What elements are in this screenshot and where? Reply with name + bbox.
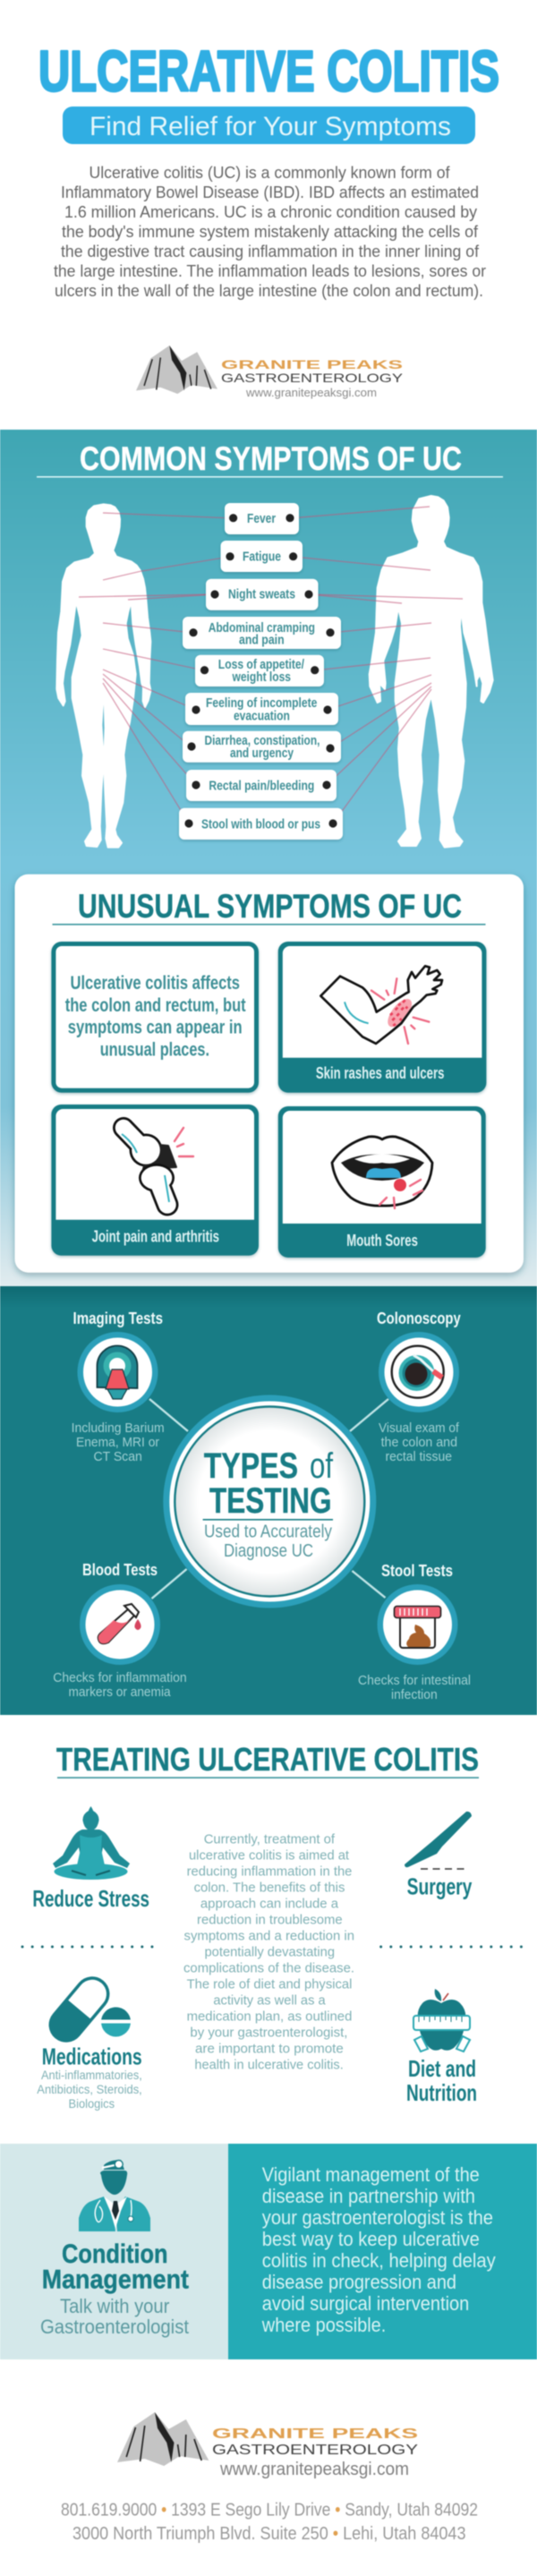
subtitle pill: Find Relief for Your Symptoms bbox=[90, 112, 451, 141]
heading: common symptoms: COMMON SYMPTOMS OF UC bbox=[80, 439, 462, 477]
symptom: abdominal cramping bbox=[183, 617, 341, 649]
treatment paragraph: reduction in troublesome bbox=[197, 1912, 343, 1928]
intro paragraph: ulcers in the wall of the large intestine (the colon and rectum). bbox=[55, 282, 483, 300]
panel: condition management: Gastroenterologist bbox=[40, 2316, 189, 2338]
intro paragraph: the digestive tract causing inflammation in the inner lining of bbox=[61, 243, 480, 260]
treatment paragraph bbox=[183, 1831, 354, 2073]
treatment paragraph: ulcerative colitis is aimed at bbox=[189, 1847, 350, 1864]
treatment paragraph: health in ulcerative colitis. bbox=[194, 2057, 344, 2073]
test: stool: infection bbox=[391, 1688, 438, 1702]
body silhouette: woman bbox=[56, 504, 150, 848]
symptom: diarrhea: and urgency bbox=[230, 746, 294, 761]
panel: vigilant management bbox=[228, 2144, 537, 2359]
treatment: diet and nutrition: Diet and bbox=[408, 2055, 476, 2082]
section background: intro bbox=[0, 0, 537, 430]
test: colonoscopy: the colon and bbox=[381, 1436, 457, 1450]
symptom: fever: Fever bbox=[247, 511, 276, 526]
panel: vigilant management: disease progression and bbox=[262, 2271, 456, 2293]
treatment paragraph: colon. The benefits of this bbox=[194, 1880, 345, 1896]
treatment paragraph: activity as well as a bbox=[213, 1992, 326, 2009]
treatment: medications: Biologics bbox=[68, 2096, 115, 2111]
symptom: incomplete evacuation: evacuation bbox=[234, 709, 290, 723]
test: colonoscopy: Visual exam of bbox=[379, 1421, 460, 1436]
center circle: types of testing: of bbox=[310, 1446, 334, 1486]
icon: scalpel bbox=[405, 1812, 472, 1869]
panel: condition management: Condition bbox=[62, 2239, 168, 2269]
icon: mouth bbox=[332, 1137, 432, 1208]
icon: meditation bbox=[53, 1806, 130, 1880]
treatment: medications bbox=[37, 1969, 142, 2111]
dotted divider left bbox=[22, 1946, 152, 1948]
intro paragraph bbox=[54, 164, 486, 300]
symptom: night sweats bbox=[206, 579, 319, 610]
panel: vigilant management: avoid surgical intervention bbox=[262, 2292, 469, 2315]
icon: arm with rash bbox=[320, 966, 442, 1044]
treatment paragraph: by your gastroenterologist, bbox=[190, 2025, 347, 2041]
icon: joint bbox=[122, 1128, 193, 1205]
logo: Granite Peaks bottom: www.granitepeaksgi.com bbox=[219, 2460, 409, 2479]
contact details: 3000 North Triumph Blvd. Suite 250 • Lehi, Utah 84043 bbox=[72, 2524, 465, 2544]
section background: testing bbox=[0, 1286, 537, 1715]
logo: Granite Peaks top: GRANITE PEAKS bbox=[221, 357, 403, 371]
treatment paragraph: symptoms and a reduction in bbox=[184, 1928, 354, 1944]
intro paragraph: Ulcerative colitis (UC) is a commonly known form of bbox=[90, 164, 450, 182]
symptom: stool with blood: Stool with blood or pus bbox=[201, 816, 320, 832]
contact details bbox=[61, 2501, 478, 2544]
symptom: rectal pain: Rectal pain/bleeding bbox=[209, 779, 314, 793]
card: joint pain: Joint pain and arthritis bbox=[92, 1228, 219, 1246]
panel: unusual symptoms bbox=[14, 874, 524, 1273]
symptom: fatigue: Fatigue bbox=[243, 550, 281, 565]
symptom: abdominal cramping: and pain bbox=[239, 632, 285, 648]
treatment paragraph: The role of diet and physical bbox=[187, 1976, 352, 1992]
symptom: diarrhea: Diarrhea, constipation, bbox=[204, 733, 320, 748]
symptom: night sweats: Night sweats bbox=[228, 587, 295, 602]
treatment paragraph: medication plan, as outlined bbox=[187, 2009, 352, 2025]
treatment: medications: Anti-inflammatories, bbox=[41, 2068, 142, 2082]
card: mouth sores bbox=[278, 1106, 486, 1258]
card: mouth sores: Mouth Sores bbox=[346, 1232, 418, 1250]
icon: test tube bbox=[98, 1604, 141, 1643]
panel: vigilant management: colitis in check, helping delay bbox=[262, 2249, 496, 2272]
treatment: diet and nutrition bbox=[406, 1989, 477, 2106]
treatment: reduce stress: Reduce Stress bbox=[32, 1885, 149, 1912]
treatment paragraph: potentially devastating bbox=[204, 1944, 335, 1960]
test: blood: Checks for inflammation bbox=[53, 1671, 187, 1685]
test: blood: markers or anemia bbox=[68, 1685, 171, 1700]
icon: doctor bbox=[79, 2160, 150, 2231]
icon: apple with tape bbox=[413, 1989, 470, 2051]
subtitle pill bbox=[63, 107, 475, 144]
icon: pills bbox=[42, 1969, 132, 2050]
symptom: loss of appetite: weight loss bbox=[232, 670, 291, 685]
symptom: fever bbox=[225, 503, 299, 534]
panel: vigilant management: disease in partnership with bbox=[262, 2185, 475, 2207]
test: blood: Blood Tests bbox=[82, 1561, 158, 1579]
icon: MRI scanner bbox=[97, 1346, 138, 1399]
symptom: abdominal cramping: Abdominal cramping bbox=[209, 620, 315, 635]
icon: mountain bbox=[117, 2412, 209, 2466]
test: colonoscopy bbox=[377, 1309, 461, 1464]
card: skin rashes bbox=[278, 942, 486, 1093]
icon: colonoscopy view bbox=[392, 1346, 444, 1398]
treatment: medications: Antibiotics, Steroids, bbox=[37, 2082, 142, 2096]
symptom: rectal pain bbox=[186, 770, 337, 801]
test: colonoscopy: rectal tissue bbox=[385, 1450, 452, 1464]
panel: vigilant management: your gastroenterologist is the bbox=[262, 2206, 493, 2229]
dotted divider right bbox=[381, 1946, 521, 1948]
panel: condition management: Talk with your bbox=[60, 2295, 169, 2317]
card: intro text: Ulcerative colitis affects bbox=[70, 973, 240, 994]
section background: treatment bbox=[0, 1715, 537, 2144]
card: intro text: the colon and rectum, but bbox=[65, 995, 246, 1016]
card: intro text: unusual places. bbox=[100, 1040, 209, 1060]
logo: Granite Peaks top bbox=[136, 345, 404, 399]
contact details: 801.619.9000 • 1393 E Sego Lily Drive • Sandy, Utah 84092 bbox=[61, 2501, 478, 2521]
symptom: incomplete evacuation: Feeling of incomplete bbox=[206, 695, 317, 711]
logo: Granite Peaks bottom: GRANITE PEAKS bbox=[212, 2427, 419, 2442]
test: blood bbox=[53, 1561, 187, 1700]
intro paragraph: the body's immune system mistakenly attacking the cells of bbox=[62, 223, 479, 241]
center circle: types of testing: TESTING bbox=[209, 1481, 331, 1521]
test: stool: Checks for intestinal bbox=[358, 1674, 471, 1688]
treatment: surgery: Surgery bbox=[407, 1873, 473, 1900]
icon: stool sample jar bbox=[394, 1606, 440, 1648]
symptom: fatigue bbox=[220, 541, 303, 572]
test: imaging: Enema, MRI or bbox=[76, 1436, 159, 1450]
logo: Granite Peaks top: www.granitepeaksgi.com bbox=[245, 386, 377, 399]
test: imaging: Including Barium bbox=[72, 1421, 165, 1436]
symptom: diarrhea bbox=[183, 731, 341, 763]
symptom: incomplete evacuation bbox=[185, 693, 338, 725]
treatment: surgery bbox=[405, 1812, 473, 1900]
center circle: types of testing: Used to Accurately bbox=[204, 1522, 332, 1541]
center circle: types of testing: Diagnose UC bbox=[224, 1541, 313, 1561]
leader lines: symptoms to bodies bbox=[79, 507, 463, 823]
center circle: types of testing bbox=[163, 1395, 376, 1608]
symptom: loss of appetite: Loss of appetite/ bbox=[218, 657, 305, 672]
icon: mountain bbox=[136, 345, 217, 394]
treatment: diet and nutrition: Nutrition bbox=[406, 2079, 477, 2106]
test: stool: Stool Tests bbox=[381, 1562, 453, 1580]
panel: condition management: Management bbox=[42, 2265, 189, 2295]
card: intro text bbox=[54, 943, 257, 1090]
logo: Granite Peaks bottom: GASTROENTEROLOGY bbox=[212, 2443, 418, 2458]
intro paragraph: Inflammatory Bowel Disease (IBD). IBD affects an estimated bbox=[61, 183, 479, 201]
treatment paragraph: Currently, treatment of bbox=[204, 1831, 336, 1847]
panel: condition management bbox=[0, 2144, 229, 2359]
intro paragraph: 1.6 million Americans. UC is a chronic condition caused by bbox=[64, 203, 477, 221]
card: skin rashes: Skin rashes and ulcers bbox=[316, 1064, 444, 1082]
panel: vigilant management: where possible. bbox=[261, 2314, 386, 2336]
treatment: medications: Medications bbox=[42, 2043, 142, 2070]
symptom: stool with blood bbox=[179, 808, 343, 840]
test: imaging: Imaging Tests bbox=[73, 1309, 163, 1327]
treatment paragraph: approach can include a bbox=[200, 1896, 339, 1912]
symptom: loss of appetite bbox=[195, 655, 324, 687]
body silhouette: man bbox=[370, 496, 493, 848]
treatment paragraph: complications of the disease. bbox=[183, 1960, 354, 1976]
center circle: types of testing: TYPES bbox=[204, 1446, 298, 1486]
connector lines bbox=[149, 1399, 388, 1599]
test: colonoscopy: Colonoscopy bbox=[377, 1309, 461, 1327]
treatment: reduce stress bbox=[32, 1806, 149, 1912]
treatment paragraph: are important to promote bbox=[195, 2041, 344, 2057]
test: imaging bbox=[72, 1309, 165, 1464]
treatment paragraph: reducing inflammation in the bbox=[187, 1864, 352, 1880]
logo: Granite Peaks bottom bbox=[117, 2412, 419, 2479]
test: imaging: CT Scan bbox=[93, 1450, 142, 1464]
card: joint pain bbox=[51, 1105, 259, 1256]
intro paragraph: the large intestine. The inflammation leads to lesions, sores or bbox=[54, 262, 486, 280]
test: stool bbox=[358, 1562, 471, 1702]
panel: vigilant management: best way to keep ulcerative bbox=[262, 2228, 480, 2250]
logo: Granite Peaks top: GASTROENTEROLOGY bbox=[221, 371, 404, 385]
panel: vigilant management: Vigilant management of the bbox=[262, 2163, 480, 2186]
card: intro text: symptoms can appear in bbox=[68, 1017, 243, 1038]
section background: symptoms bbox=[0, 430, 537, 1286]
